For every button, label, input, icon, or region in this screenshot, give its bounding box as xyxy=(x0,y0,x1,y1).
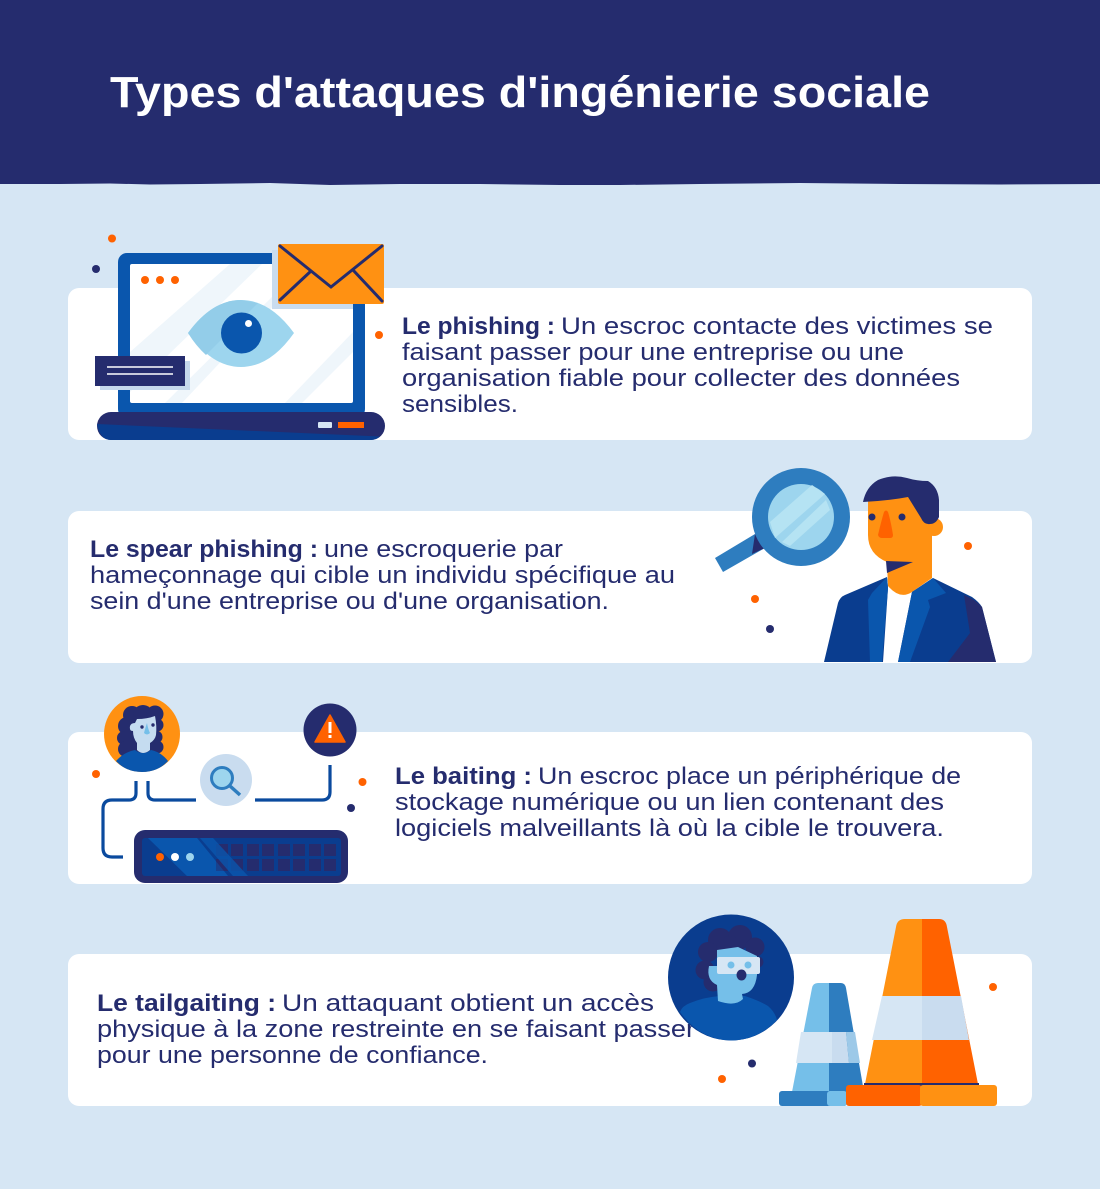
text: spear phishing description xyxy=(90,536,675,615)
text: spear phishing description: une escroquerie par xyxy=(324,536,563,563)
connector lines xyxy=(103,765,330,857)
text: spear phishing description: Le spear phishing : xyxy=(90,536,318,563)
text: phishing description: Un escroc contacte des victimes se xyxy=(561,313,993,340)
text: tailgaiting description: pour une personne de confiance. xyxy=(97,1042,488,1069)
text: tailgaiting description xyxy=(97,990,695,1069)
text: baiting description xyxy=(395,763,961,842)
text: baiting description: logiciels malveillants là où la cible le trouvera. xyxy=(395,815,944,842)
text: spear phishing description: sein d'une entreprise ou d'une organisation. xyxy=(90,588,609,615)
panel: tailgaiting xyxy=(68,914,1032,1106)
text: spear phishing description: hameçonnage qui cible un individu spécifique au xyxy=(90,562,675,589)
dots: spear phishing xyxy=(751,542,972,633)
header banner xyxy=(0,0,1100,185)
dots: tailgaiting xyxy=(718,983,997,1083)
card: spear phishing xyxy=(68,511,1032,663)
dots: phishing xyxy=(92,234,383,339)
panel: baiting xyxy=(68,696,1032,884)
text: baiting description: Un escroc place un périphérique de xyxy=(538,763,961,790)
text: phishing description: organisation fiable pour collecter des données xyxy=(402,365,960,392)
card: tailgaiting xyxy=(68,954,1032,1106)
panel: spear phishing xyxy=(68,468,1032,663)
icon: woman avatar xyxy=(104,696,180,772)
icon: warning badge xyxy=(304,704,356,756)
title: Types d'attaques d'ingénierie sociale xyxy=(110,68,930,117)
text: baiting description: Le baiting : xyxy=(395,763,532,790)
dots: baiting xyxy=(92,770,366,812)
text: tailgaiting description: physique à la zone restreinte en se faisant passer xyxy=(97,1016,695,1043)
text: phishing description: faisant passer pour une entreprise ou une xyxy=(402,339,904,366)
text: tailgaiting description: Le tailgaiting : xyxy=(97,990,276,1017)
text: phishing description: Le phishing : xyxy=(402,313,555,340)
card: phishing xyxy=(68,288,1032,440)
icon: large orange cone xyxy=(846,919,997,1106)
icon: laptop with eye and envelope xyxy=(95,244,385,440)
icon: network device xyxy=(134,830,348,883)
text: phishing description: sensibles. xyxy=(402,391,518,418)
text: tailgaiting description: Un attaquant obtient un accès xyxy=(282,990,654,1017)
card: baiting xyxy=(68,732,1032,884)
icon: man in suit xyxy=(824,476,996,662)
icon: small blue cone xyxy=(779,983,864,1106)
text: baiting description: stockage numérique ou un lien contenant des xyxy=(395,789,944,816)
icon: magnifying glass xyxy=(715,468,850,572)
icon: search badge xyxy=(200,754,252,806)
icon: man with goggles avatar xyxy=(668,914,794,1040)
panel: phishing xyxy=(68,234,1032,440)
text: phishing description xyxy=(402,313,993,418)
